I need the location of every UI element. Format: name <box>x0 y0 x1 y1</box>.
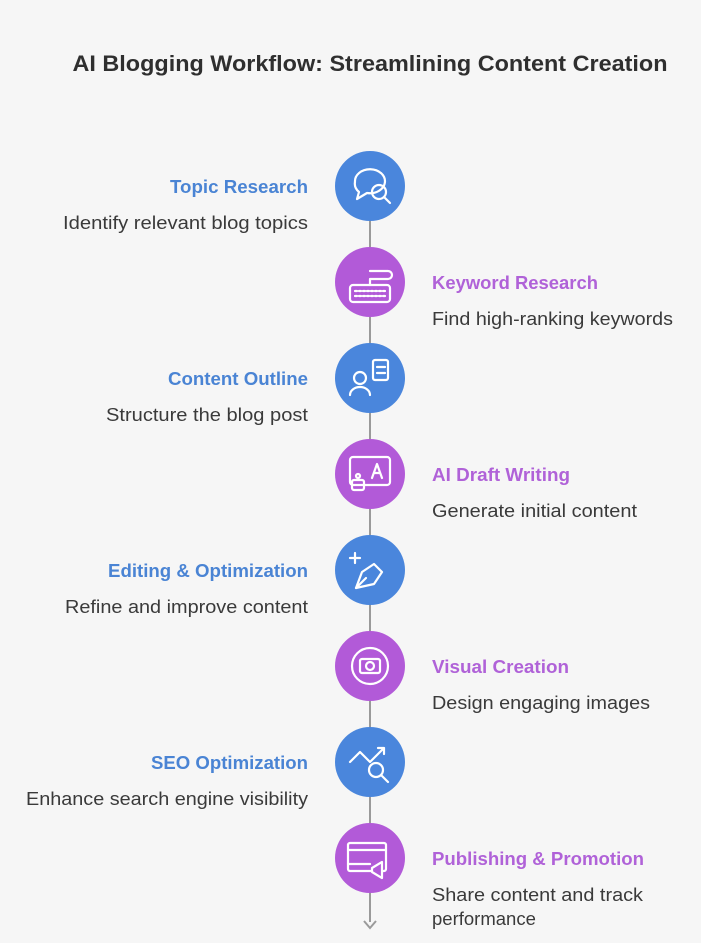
step 8: Publishing & Promotion <box>335 823 644 929</box>
icon: film and megaphone <box>348 843 386 878</box>
step 2: Keyword Research: Keyword Research <box>432 273 598 293</box>
title: AI Blogging Workflow: Streamlining Content Creation <box>72 51 668 76</box>
step 1: Topic Research: Topic Research <box>170 177 308 197</box>
step 7: SEO Optimization: SEO Optimization <box>151 753 308 773</box>
step 5: Editing & Optimization <box>65 535 405 617</box>
step 3: Content Outline: Structure the blog post <box>106 404 308 425</box>
step 3: Content Outline <box>106 343 405 425</box>
connector line <box>364 220 376 928</box>
icon: chat search <box>355 169 390 203</box>
step 7: SEO Optimization <box>26 727 405 809</box>
step 4: AI Draft Writing: Generate initial content <box>432 500 637 521</box>
icon: camera <box>352 648 388 684</box>
step 3: Content Outline: Content Outline <box>168 369 308 389</box>
icon: person with checklist <box>350 360 388 395</box>
step 7: SEO Optimization: Enhance search engine visibility <box>26 788 309 809</box>
step 4: AI Draft Writing: AI Draft Writing <box>432 465 570 485</box>
icon: trend search <box>350 748 388 782</box>
step 8: Publishing & Promotion: performance <box>432 908 536 929</box>
step 2: Keyword Research <box>335 247 673 329</box>
icon: pen nib <box>350 553 382 588</box>
icon: keyboard <box>350 271 392 302</box>
step 1: Topic Research <box>63 151 405 233</box>
step 6: Visual Creation: Visual Creation <box>432 657 569 677</box>
step 6: Visual Creation <box>335 631 650 713</box>
step 1: Topic Research: Identify relevant blog topics <box>63 212 308 233</box>
step 5: Editing & Optimization: Editing & Optimization <box>108 561 308 581</box>
step 8: Publishing & Promotion: Publishing & Promotion <box>432 849 644 869</box>
step 2: Keyword Research: Find high-ranking keywords <box>432 308 673 329</box>
icon: robot with A <box>350 457 390 490</box>
step 5: Editing & Optimization: Refine and improve content <box>65 596 308 617</box>
step 4: AI Draft Writing <box>335 439 637 521</box>
step 6: Visual Creation: Design engaging images <box>432 692 650 713</box>
step 8: Publishing & Promotion: Share content and track <box>432 884 644 905</box>
